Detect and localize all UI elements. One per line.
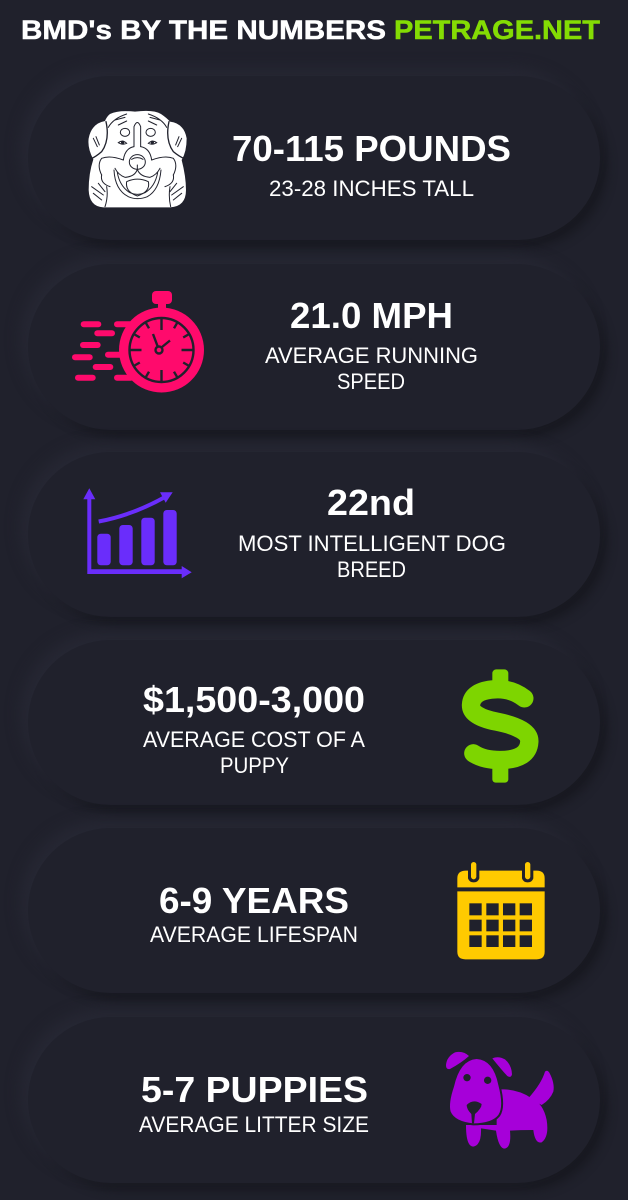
icon: dollar sign bbox=[471, 669, 529, 783]
text: cost bbox=[143, 679, 365, 778]
icon: puppy bbox=[446, 1052, 554, 1149]
panel: running speed bbox=[28, 264, 600, 430]
panel: lifespan bbox=[28, 828, 600, 993]
text: 22nd: BREED bbox=[337, 557, 406, 582]
text: 70-115 pounds: 23-28 INCHES TALL bbox=[269, 176, 474, 201]
text: 21.0 mph: AVERAGE RUNNING bbox=[265, 343, 478, 368]
text: 70-115 pounds: 70-115 POUNDS bbox=[232, 128, 511, 169]
text: lifespan bbox=[150, 880, 358, 947]
text: 21.0 mph bbox=[265, 295, 478, 394]
icon: dog face bbox=[88, 111, 187, 207]
text: 70-115 pounds bbox=[232, 128, 511, 201]
text: 22nd: MOST INTELLIGENT DOG bbox=[238, 531, 506, 556]
text: litter size bbox=[139, 1069, 369, 1137]
text: cost: AVERAGE COST OF A bbox=[143, 727, 365, 752]
text: litter size: 5-7 PUPPIES bbox=[141, 1069, 368, 1110]
text: 21.0 mph: SPEED bbox=[337, 369, 405, 394]
text: cost: PUPPY bbox=[220, 753, 289, 778]
panel: puppy cost bbox=[28, 640, 600, 805]
panel: litter size bbox=[28, 1017, 600, 1183]
text: cost: $1,500-3,000 bbox=[143, 679, 365, 720]
text: 22nd: 22nd bbox=[327, 482, 415, 523]
panel: intelligence bbox=[28, 452, 600, 617]
title: BMD's BY THE NUMBERS bbox=[21, 15, 386, 45]
text: lifespan: 6-9 YEARS bbox=[159, 880, 349, 921]
icon: calendar bbox=[457, 862, 545, 959]
icon: stopwatch bbox=[72, 291, 204, 392]
icon: rising bar chart bbox=[83, 488, 192, 578]
text: litter size: AVERAGE LITTER SIZE bbox=[139, 1112, 369, 1137]
title: PETRAGE.NET bbox=[394, 15, 601, 45]
text: 22nd bbox=[238, 482, 506, 582]
text: lifespan: AVERAGE LIFESPAN bbox=[150, 922, 358, 947]
panel: weight and height bbox=[28, 76, 600, 240]
text: 21.0 mph: 21.0 MPH bbox=[290, 295, 453, 336]
title bbox=[21, 15, 601, 45]
